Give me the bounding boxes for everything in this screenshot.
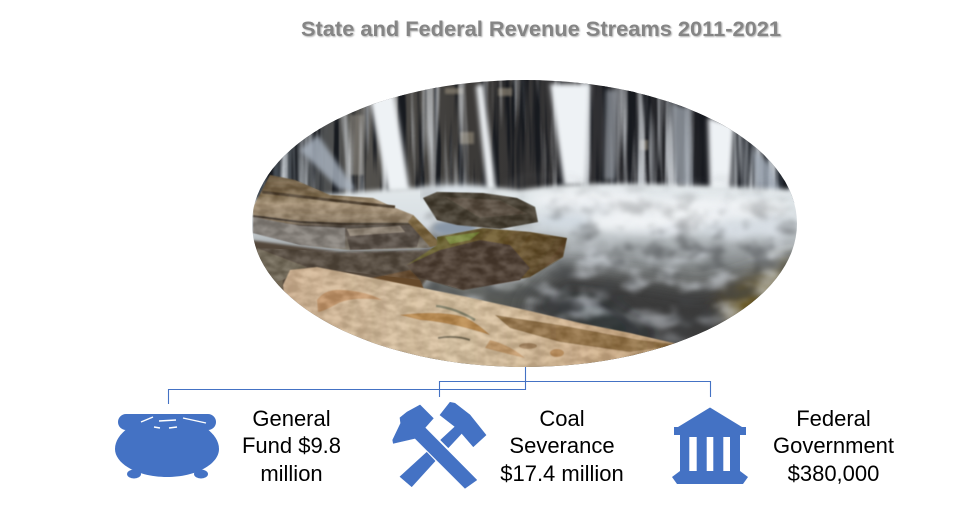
lower left slab <box>257 248 307 292</box>
pebbles below left rock <box>254 238 430 294</box>
mossy boulder <box>407 228 567 290</box>
icon: crossed hammers <box>393 402 486 488</box>
text: coal severance: $17.4 million <box>500 461 624 486</box>
text: general fund: Fund $9.8 <box>242 433 341 458</box>
rock wall backdrop <box>250 78 800 203</box>
icon: pot of gold <box>115 414 219 478</box>
pool of water <box>250 184 800 370</box>
main bright waterfall columns <box>300 84 782 195</box>
dark streaks in wall <box>264 80 789 196</box>
title: State and Federal Revenue Streams 2011-2021 <box>301 18 781 41</box>
white foam <box>420 186 795 235</box>
brown stone by sandy rock <box>374 270 424 288</box>
dark boulder on top <box>423 192 538 229</box>
wall pale patches <box>350 88 648 175</box>
text: general fund: General <box>252 406 331 431</box>
text: coal severance: Coal <box>539 406 585 431</box>
text: federal government <box>773 406 894 486</box>
text: federal government: Federal <box>796 406 871 431</box>
dark and olive water <box>520 262 800 370</box>
text: coal severance <box>500 406 624 486</box>
sand rock veins <box>317 290 382 312</box>
swirling water texture <box>420 178 794 344</box>
text: federal government: $380,000 <box>788 461 879 486</box>
large sandy rock <box>283 267 682 375</box>
waterfall fine streaks <box>250 78 800 203</box>
text: coal severance: Severance <box>509 433 615 458</box>
photo: waterfall in oval frame <box>250 78 800 375</box>
text: federal government: Government <box>773 433 894 458</box>
connector lines <box>168 367 710 404</box>
text: general fund <box>242 406 341 486</box>
blue shadow under boulder <box>433 220 477 236</box>
left layered rock <box>253 175 442 250</box>
text: general fund: million <box>260 461 323 486</box>
icon: government building <box>672 408 748 484</box>
title: State and Federal Revenue Streams 2011-2021 <box>302 19 782 42</box>
rock grain texture <box>253 178 669 367</box>
